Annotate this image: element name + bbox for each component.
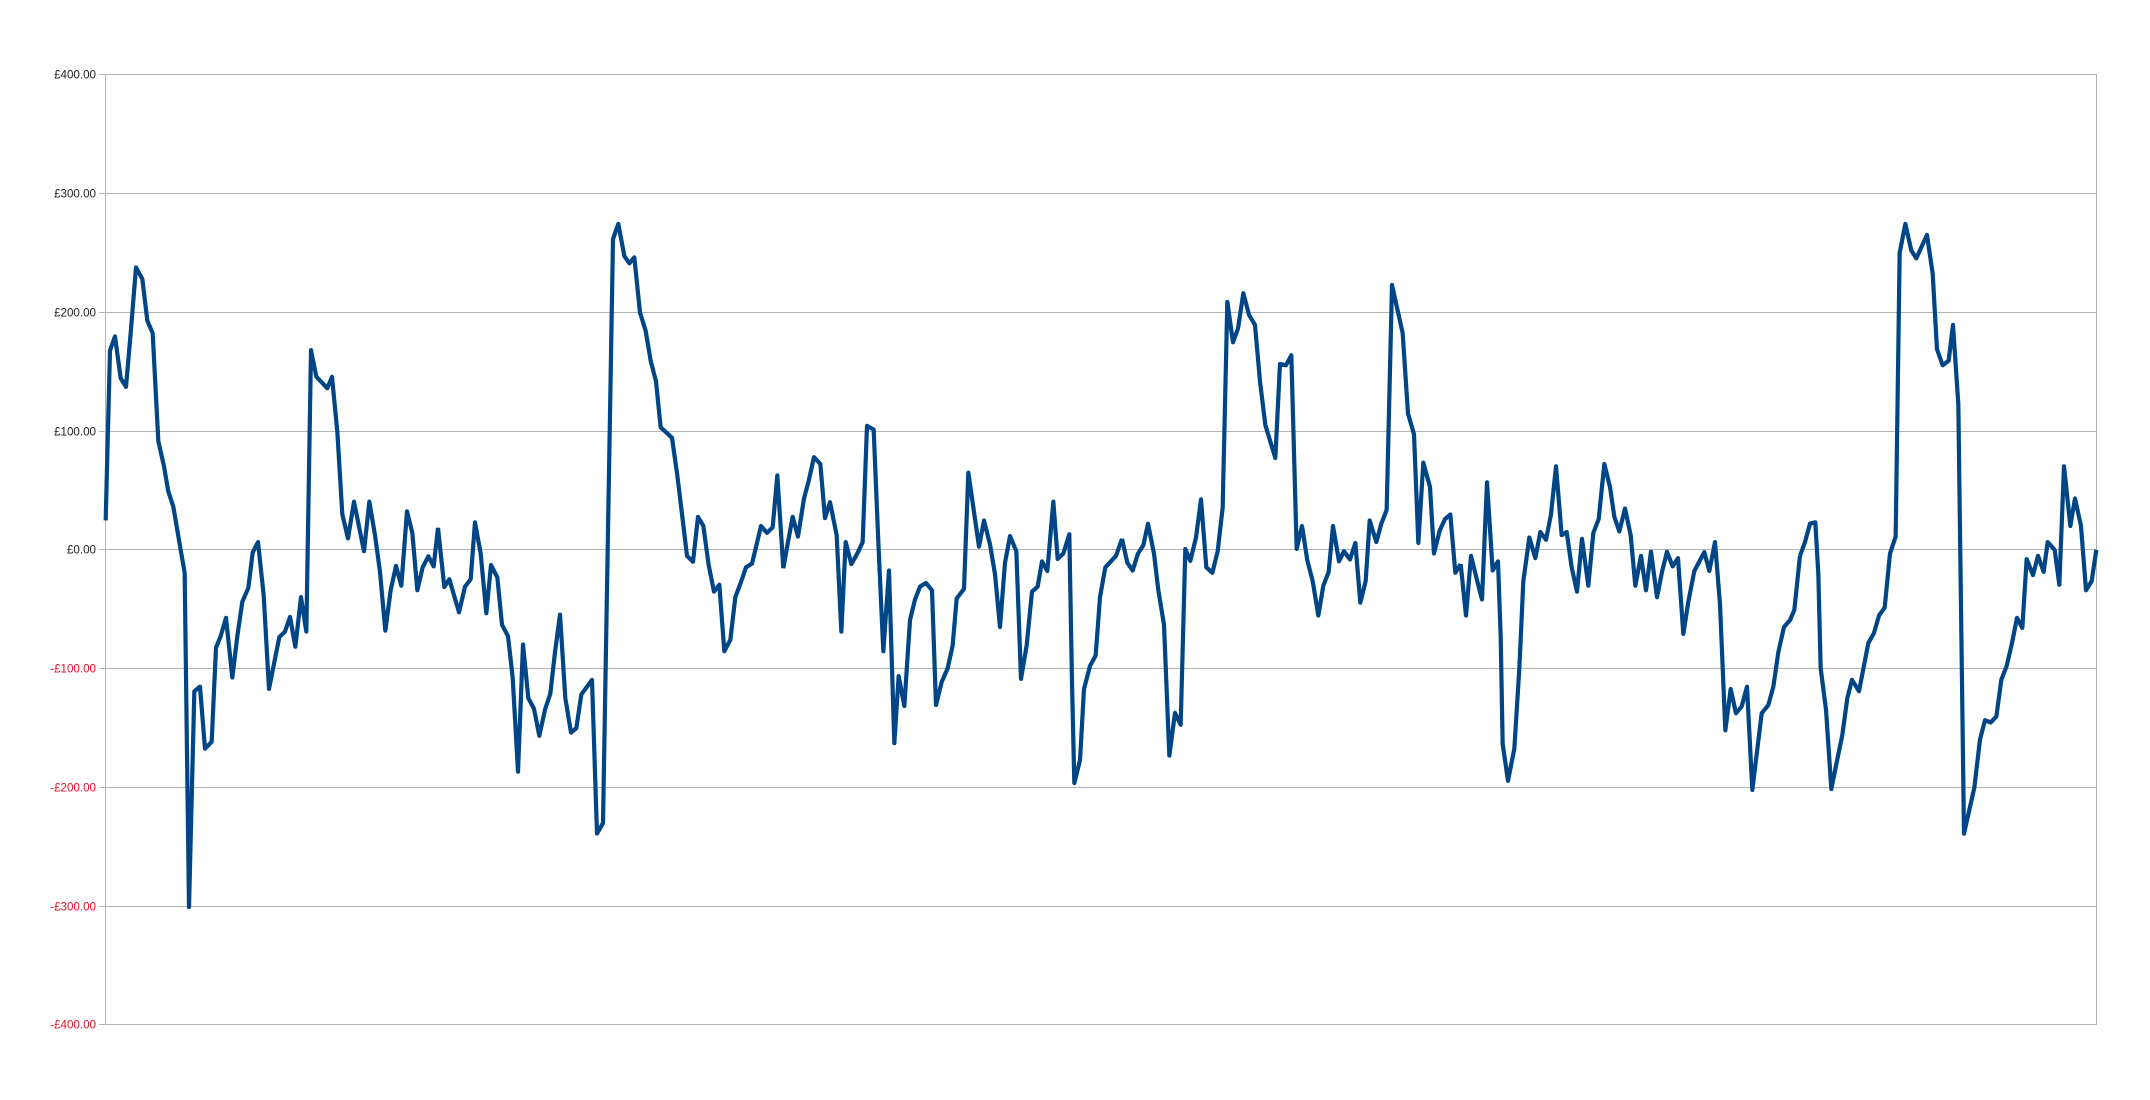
y axis labels: -£300.00 (50, 900, 96, 914)
y axis labels: £300.00 (54, 188, 96, 200)
y axis labels: -£400.00 (50, 1018, 96, 1032)
y axis labels: -£200.00 (50, 782, 96, 794)
data line (106, 224, 2096, 907)
y axis labels: £400.00 (54, 68, 96, 82)
y axis labels (50, 68, 96, 1032)
y axis labels: £100.00 (54, 426, 96, 438)
y axis labels: -£100.00 (50, 662, 96, 676)
y axis labels: £200.00 (54, 306, 96, 320)
y axis labels: £0.00 (67, 544, 96, 556)
